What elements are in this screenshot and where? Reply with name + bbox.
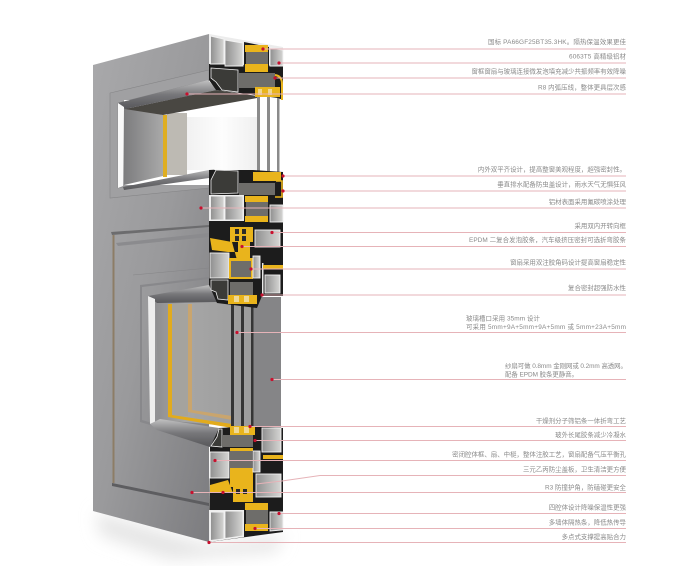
callout 13 xyxy=(270,361,627,381)
lower sash frame lines xyxy=(111,225,209,506)
callout 15: 玻外长尾胶条减少冷凝水 xyxy=(555,430,627,439)
callout 12: 玻璃槽口采用 35mm 设计 xyxy=(466,314,541,323)
callout 19: 四腔体设计降噪保温性更强 xyxy=(549,503,627,512)
callout 7 xyxy=(199,197,627,210)
floor shadow xyxy=(96,512,285,560)
callout 6: 垂直排水配备防虫盖设计，雨水天气无惧狂风 xyxy=(497,180,627,189)
callout 21 xyxy=(207,532,626,544)
callout 21: 多点式支撑提高贴合力 xyxy=(562,532,626,541)
callout 14: 干燥剂分子筛铝条一体折弯工艺 xyxy=(536,416,626,425)
callout 10 xyxy=(249,257,627,271)
top frame cross-section xyxy=(209,34,283,100)
callout 1 xyxy=(261,37,627,51)
callout 20: 多墙体隔热条，降低热传导 xyxy=(549,518,627,527)
lower window opening xyxy=(148,285,255,447)
callout 3 xyxy=(273,66,627,80)
callout 9 xyxy=(240,235,627,248)
insect screen mesh xyxy=(253,297,281,428)
callout 10: 窗扇采用双注胶角码设计提高窗扇稳定性 xyxy=(510,257,627,266)
callout 18 xyxy=(190,482,627,494)
callout 17 xyxy=(256,465,627,484)
callout 11 xyxy=(260,283,627,297)
callout 11: 复合密封超强防水性 xyxy=(568,283,627,292)
callout 15 xyxy=(253,430,627,442)
callout 2: 6063T5 高精级铝材 xyxy=(569,52,627,61)
callout 9: EPDM 二复合发泡胶条，汽车级挤压密封可选折弯胶条 xyxy=(469,235,627,244)
window product illustration xyxy=(93,34,283,542)
callout 8: 采用双内开转向框 xyxy=(574,221,627,230)
callout 12: 可采用 5mm+9A+5mm+9A+5mm 或 5mm+23A+5mm xyxy=(466,322,626,331)
callout 19 xyxy=(277,503,627,515)
callout 5: 内外双平齐设计，提高整窗美观程度，超强密封性。 xyxy=(478,165,626,174)
callout 12 xyxy=(235,314,626,334)
callout 3: 窗框窗扇与玻璃连接微发泡填充减少共振频率有效降噪 xyxy=(471,66,627,75)
callout 2 xyxy=(277,52,627,65)
callout 5 xyxy=(281,165,626,178)
upper window opening xyxy=(110,70,257,198)
upper glass panes xyxy=(257,94,280,175)
callout 14 xyxy=(248,416,626,428)
middle sash cross-section xyxy=(209,226,283,308)
callout 13: 配备 EPDM 胶条更静音。 xyxy=(505,369,578,378)
callout 17: 三元乙丙防尘盖板，卫生清洁更方便 xyxy=(523,465,627,474)
bottom sash cross-section xyxy=(209,426,283,542)
callout 6 xyxy=(281,180,627,193)
callout 20 xyxy=(253,518,627,530)
aluminium face panel xyxy=(93,34,209,542)
transom cross-section xyxy=(209,170,283,226)
callout 4 xyxy=(185,82,627,96)
callout 8 xyxy=(270,221,627,234)
callout 18: R3 防撞护角，防磕碰更安全 xyxy=(545,482,627,491)
callout 13: 纱扇可做 0.8mm 金刚网或 0.2mm 高透网。 xyxy=(505,361,627,370)
callout 7: 铝材表面采用氟碳喷涂处理 xyxy=(549,197,627,206)
callout 16 xyxy=(213,450,627,462)
callout 4: R8 内弧压线，整体更具层次感 xyxy=(538,82,627,91)
lower glass panes xyxy=(231,303,254,426)
callout 1: 国标 PA66GF25BT35.3HK。隔热保温效果更佳 xyxy=(488,37,627,46)
callout 16: 密闭腔体框、扇、中梃，整体注胶工艺，窗扇配备气压平衡孔 xyxy=(452,450,627,459)
bottom frame cross-section xyxy=(209,503,283,542)
